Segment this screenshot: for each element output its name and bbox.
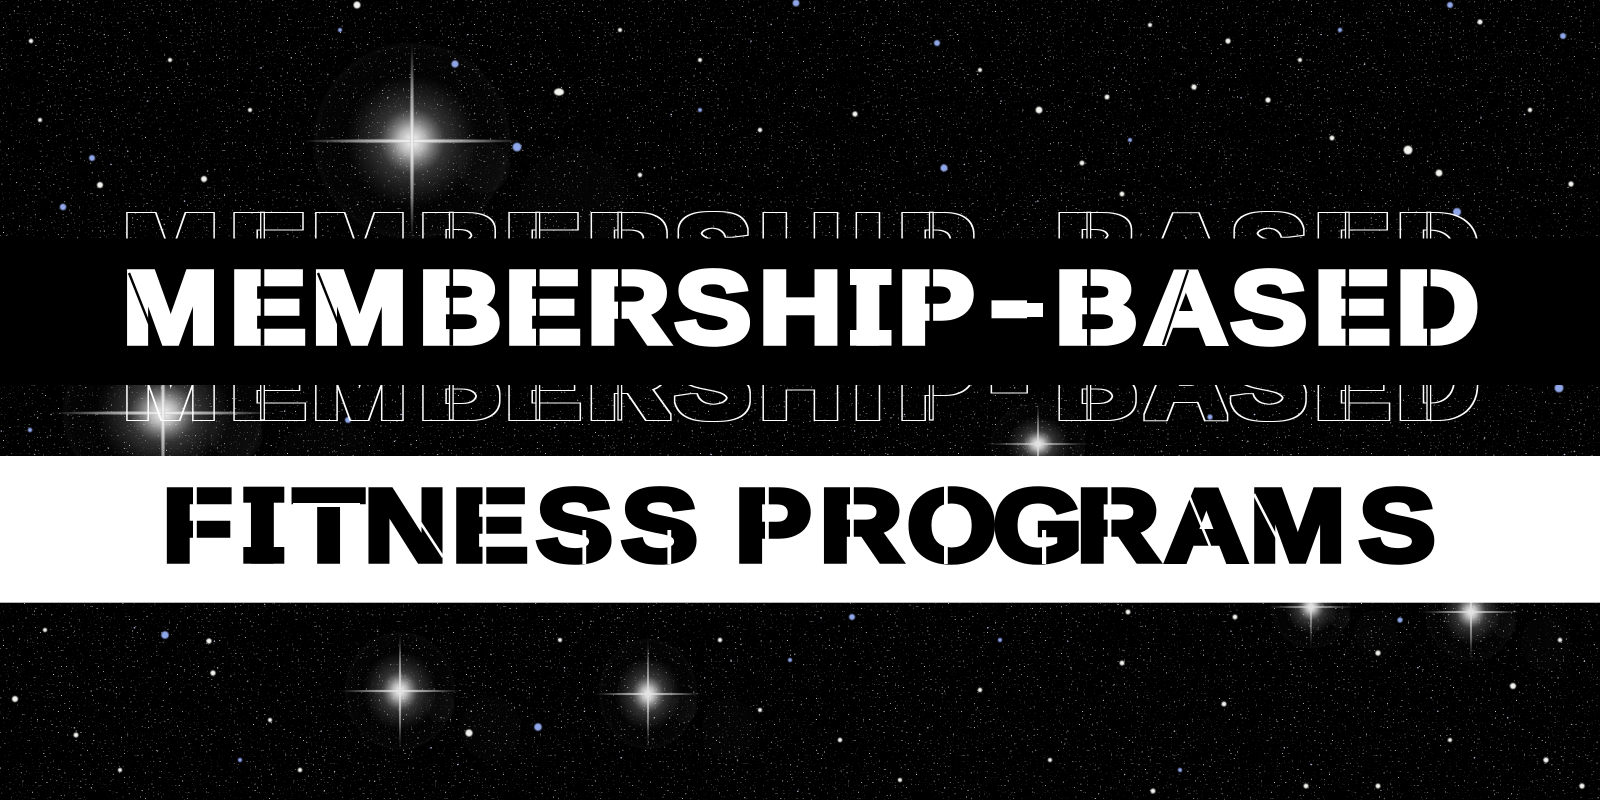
lens flare: left star behind band: [49, 323, 383, 517]
lens flare: lower left star: [337, 631, 521, 761]
lens flare: upper left star: [300, 41, 628, 257]
lens flare: lower right star two: [1419, 562, 1570, 670]
white title band: [0, 456, 1600, 603]
outline echo text below band: MEMBERSHIP-BASED: [123, 318, 1479, 440]
title line two: FITNESS PROGRAMS: FITNESS PROGRAMS: [162, 469, 1436, 584]
outline echo text above band: MEMBERSHIP-BASED: [123, 187, 1479, 309]
lens flare: centre right star: [984, 402, 1142, 493]
lens flare: lower right star one: [1266, 565, 1397, 656]
title line one: MEMBERSHIP-BASED: MEMBERSHIP-BASED: [123, 244, 1479, 366]
black title band: [0, 238, 1600, 385]
lens flare: lower centre star: [592, 638, 756, 759]
